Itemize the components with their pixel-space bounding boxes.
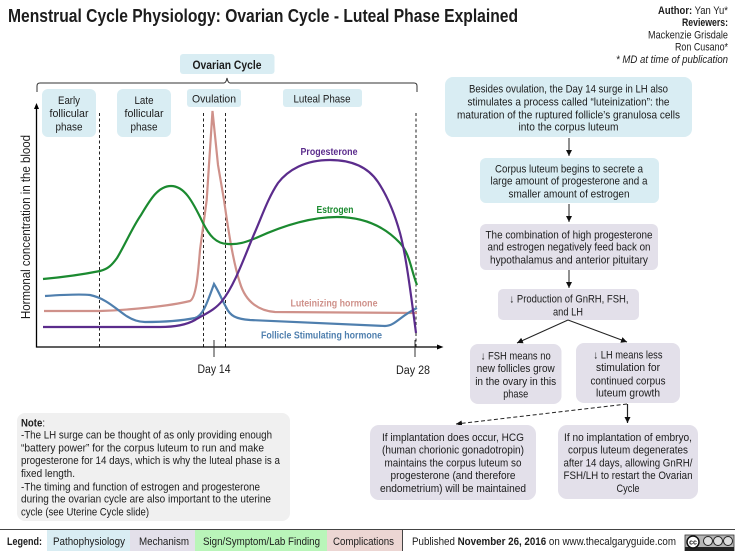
phase: luteal: Luteal Phase [294, 94, 350, 106]
legend bar: Complications [333, 536, 394, 548]
legend bar: Mechanism [139, 536, 189, 548]
phase: early follicular: follicular [50, 108, 89, 120]
author credits: Author: Yan Yu* [658, 5, 729, 17]
box: no implantation [558, 425, 698, 499]
phase: luteal [283, 89, 362, 107]
box: luteinization: stimulates a process called “luteinization”: the [468, 96, 670, 108]
phase: late follicular [117, 89, 171, 137]
panel: note: -The timing and function of estrogen and progesterone [21, 482, 260, 494]
box: reduced LH: continued corpus [590, 376, 666, 388]
box: no implantation: Cycle [616, 483, 640, 495]
heading: Ovarian Cycle: Ovarian Cycle [192, 58, 262, 72]
box: corpus luteum secretion: large amount of progesterone and a [490, 176, 648, 188]
box: reduced production [498, 289, 639, 320]
chart: ovarian cycle hormone levels [19, 54, 444, 377]
arrow [568, 138, 570, 156]
box: reduced LH [576, 343, 680, 403]
box: corpus luteum secretion: smaller amount of estrogen [508, 188, 630, 200]
box: luteinization: into the corpus luteum [518, 122, 618, 134]
legend bar: Legend: [7, 536, 42, 548]
arrow: no implantation [626, 404, 628, 423]
phase: ovulation [187, 89, 241, 107]
box: no implantation: FSH/LH to restart the Ovarian [564, 470, 692, 482]
box: reduced FSH: in the ovary in this [475, 376, 557, 388]
x-axis label: Day 14: Day 14 [198, 364, 231, 376]
phase: early follicular: Early [58, 95, 80, 107]
panel: note: progesterone for 14 days, which is why the luteal phase is a [21, 455, 281, 467]
panel: note [17, 413, 290, 521]
legend bar: Sign/Symptom/Lab Finding [203, 536, 320, 548]
curve: estrogen [43, 186, 417, 285]
legend bar: Pathophysiology [53, 536, 125, 548]
box: implantation occurs: maintains the corpus luteum so [384, 458, 522, 470]
box: reduced LH: ↓ LH means less [594, 350, 663, 362]
label: progesterone: Progesterone [300, 147, 358, 158]
box: implantation occurs: progesterone (and therefore [390, 470, 516, 482]
label: luteinizing hormone: Luteinizing hormone [290, 298, 378, 310]
panel: note: during the ovarian cycle are also important to the uterine [21, 494, 271, 506]
curve: follicle stimulating hormone [45, 284, 417, 326]
arrow: to FSH box [517, 320, 568, 343]
bracket [37, 78, 417, 92]
icon: creative commons badge: cc [689, 540, 697, 546]
dashed arrow: implantation [456, 404, 627, 424]
phase: late follicular: phase [130, 122, 158, 134]
box: reduced FSH: new follicles grow [477, 363, 555, 375]
box: reduced production: and LH [553, 306, 583, 318]
y-axis label: Hormonal concentration in the blood [19, 135, 33, 319]
box: negative feedback: The combination of high progesterone [486, 230, 652, 242]
box: reduced FSH: phase [503, 388, 528, 400]
phase: ovulation: Ovulation [192, 94, 236, 106]
label: estrogen: Estrogen [316, 205, 354, 216]
box: no implantation: If no implantation of embryo, [564, 432, 692, 444]
box: reduced production: ↓ Production of GnRH, FSH, [510, 294, 628, 306]
panel: note: -The LH surge can be thought of as only providing enough [21, 430, 272, 442]
box: negative feedback [480, 224, 658, 270]
box: luteinization: Besides ovulation, the Day 14 surge in LH also [469, 84, 668, 96]
panel: note: cycle (see Uterine Cycle slide) [21, 506, 149, 518]
box: reduced FSH [470, 344, 562, 404]
box: reduced FSH: ↓ FSH means no [481, 350, 551, 362]
heading: Ovarian Cycle [180, 54, 274, 74]
author credits [616, 5, 729, 66]
box: no implantation: after 14 days, allowing GnRH/ [564, 458, 693, 470]
box: no implantation: corpus luteum degenerates [568, 444, 688, 456]
phase boundaries [100, 113, 416, 347]
curve: luteinizing hormone [44, 111, 417, 313]
box: luteinization [445, 77, 692, 137]
axes [34, 103, 444, 357]
arrow [568, 270, 570, 288]
phase: early follicular [42, 89, 96, 137]
x-axis label: Day 28: Day 28 [396, 365, 430, 377]
box: implantation occurs: If implantation does occur, HCG [382, 432, 524, 444]
box: implantation occurs: endometrium) will be maintained [380, 483, 526, 495]
title: Menstrual Cycle Physiology: Ovarian Cycle - Luteal Phase Explained [8, 6, 518, 26]
arrow: to LH box [568, 320, 627, 342]
panel: note: Note: [21, 418, 45, 430]
box: implantation occurs [370, 425, 536, 500]
arrow [568, 204, 570, 222]
box: reduced LH: stimulation for [596, 362, 660, 374]
phase: early follicular: phase [56, 122, 82, 134]
box: luteinization: maturation of the ruptured follicle’s granulosa cells [457, 110, 680, 122]
curve: progesterone [43, 160, 416, 333]
publication line: Published November 26, 2016 on www.thecalgaryguide.com [412, 536, 676, 548]
phase: late follicular: Late [134, 95, 154, 107]
box: negative feedback: and estrogen negatively feed back on [488, 242, 650, 254]
panel: note: “battery power” for the corpus luteum to run and make [21, 442, 264, 454]
box: corpus luteum secretion [480, 158, 659, 203]
box: implantation occurs: (human chorionic gonadotropin) [382, 444, 524, 456]
panel: note: fixed length. [21, 468, 75, 480]
label: follicle stimulating hormone: Follicle Stimulating hormone [261, 330, 382, 342]
box: negative feedback: hypothalamus and anterior pituitary [490, 254, 648, 266]
phase: late follicular: follicular [124, 108, 164, 120]
box: reduced LH: luteum growth [596, 388, 660, 400]
box: corpus luteum secretion: Corpus luteum begins to secrete a [495, 164, 644, 176]
icon: creative commons badge [685, 535, 734, 551]
legend bar [0, 530, 735, 551]
